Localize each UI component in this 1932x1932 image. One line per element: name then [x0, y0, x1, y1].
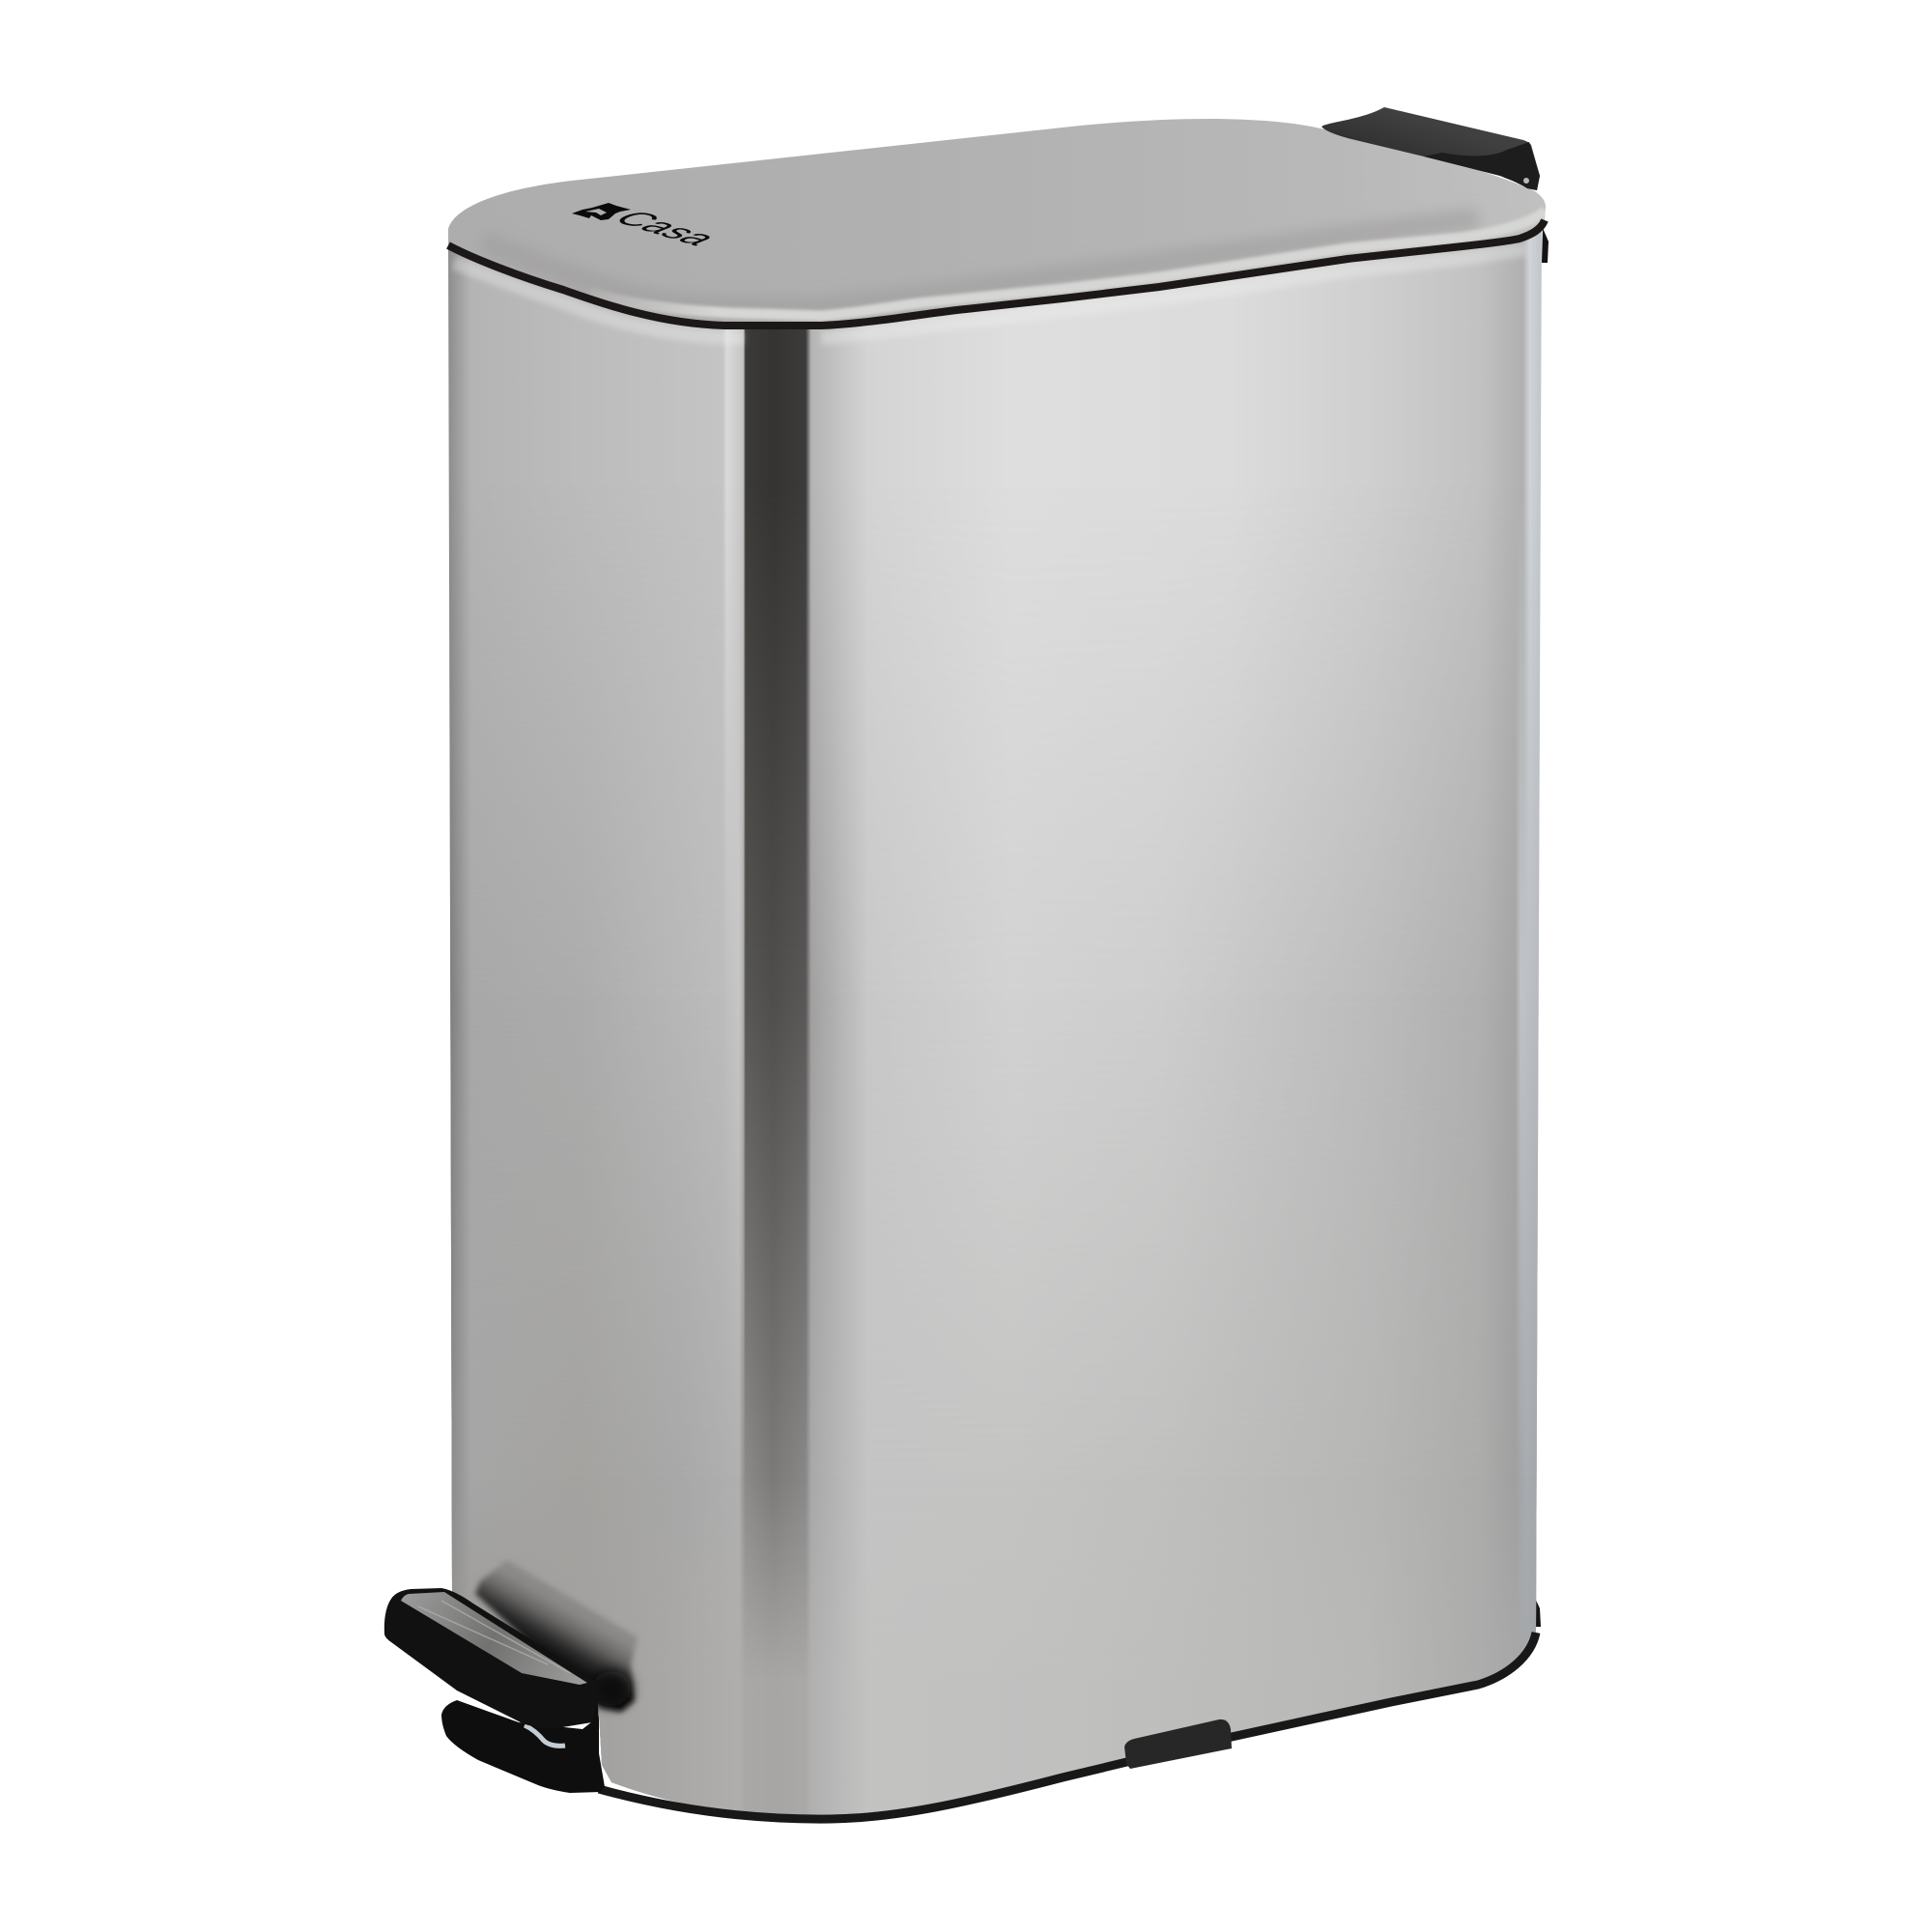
panel: foot pedal: [384, 1560, 638, 1793]
product illustration: stainless step trash can: [384, 107, 1548, 1824]
logo mark: [572, 203, 631, 220]
lid rim highlight: [589, 211, 1546, 316]
icon: bottom centre clip: [1124, 1719, 1232, 1769]
pedal recess: [475, 1560, 638, 1712]
black gasket: [448, 220, 1545, 326]
screw: [1523, 178, 1529, 184]
pedal top black: [384, 1588, 599, 1729]
brand name: Casa: [603, 207, 729, 249]
steel plate: [401, 1592, 587, 1685]
panel: lid handle: [1321, 107, 1540, 190]
lid top surface: [448, 119, 1546, 322]
panel: can body: [425, 193, 1565, 1835]
handle end lip: [1424, 142, 1540, 190]
panel: lid: [446, 119, 1548, 329]
spring: [525, 1725, 565, 1746]
lower pedal arm and stem: [441, 1695, 605, 1793]
panel: rear hinge tabs: [1533, 228, 1548, 1627]
Casa logo: [572, 203, 729, 249]
panel: bottom rim gasket: [599, 1633, 1536, 1819]
